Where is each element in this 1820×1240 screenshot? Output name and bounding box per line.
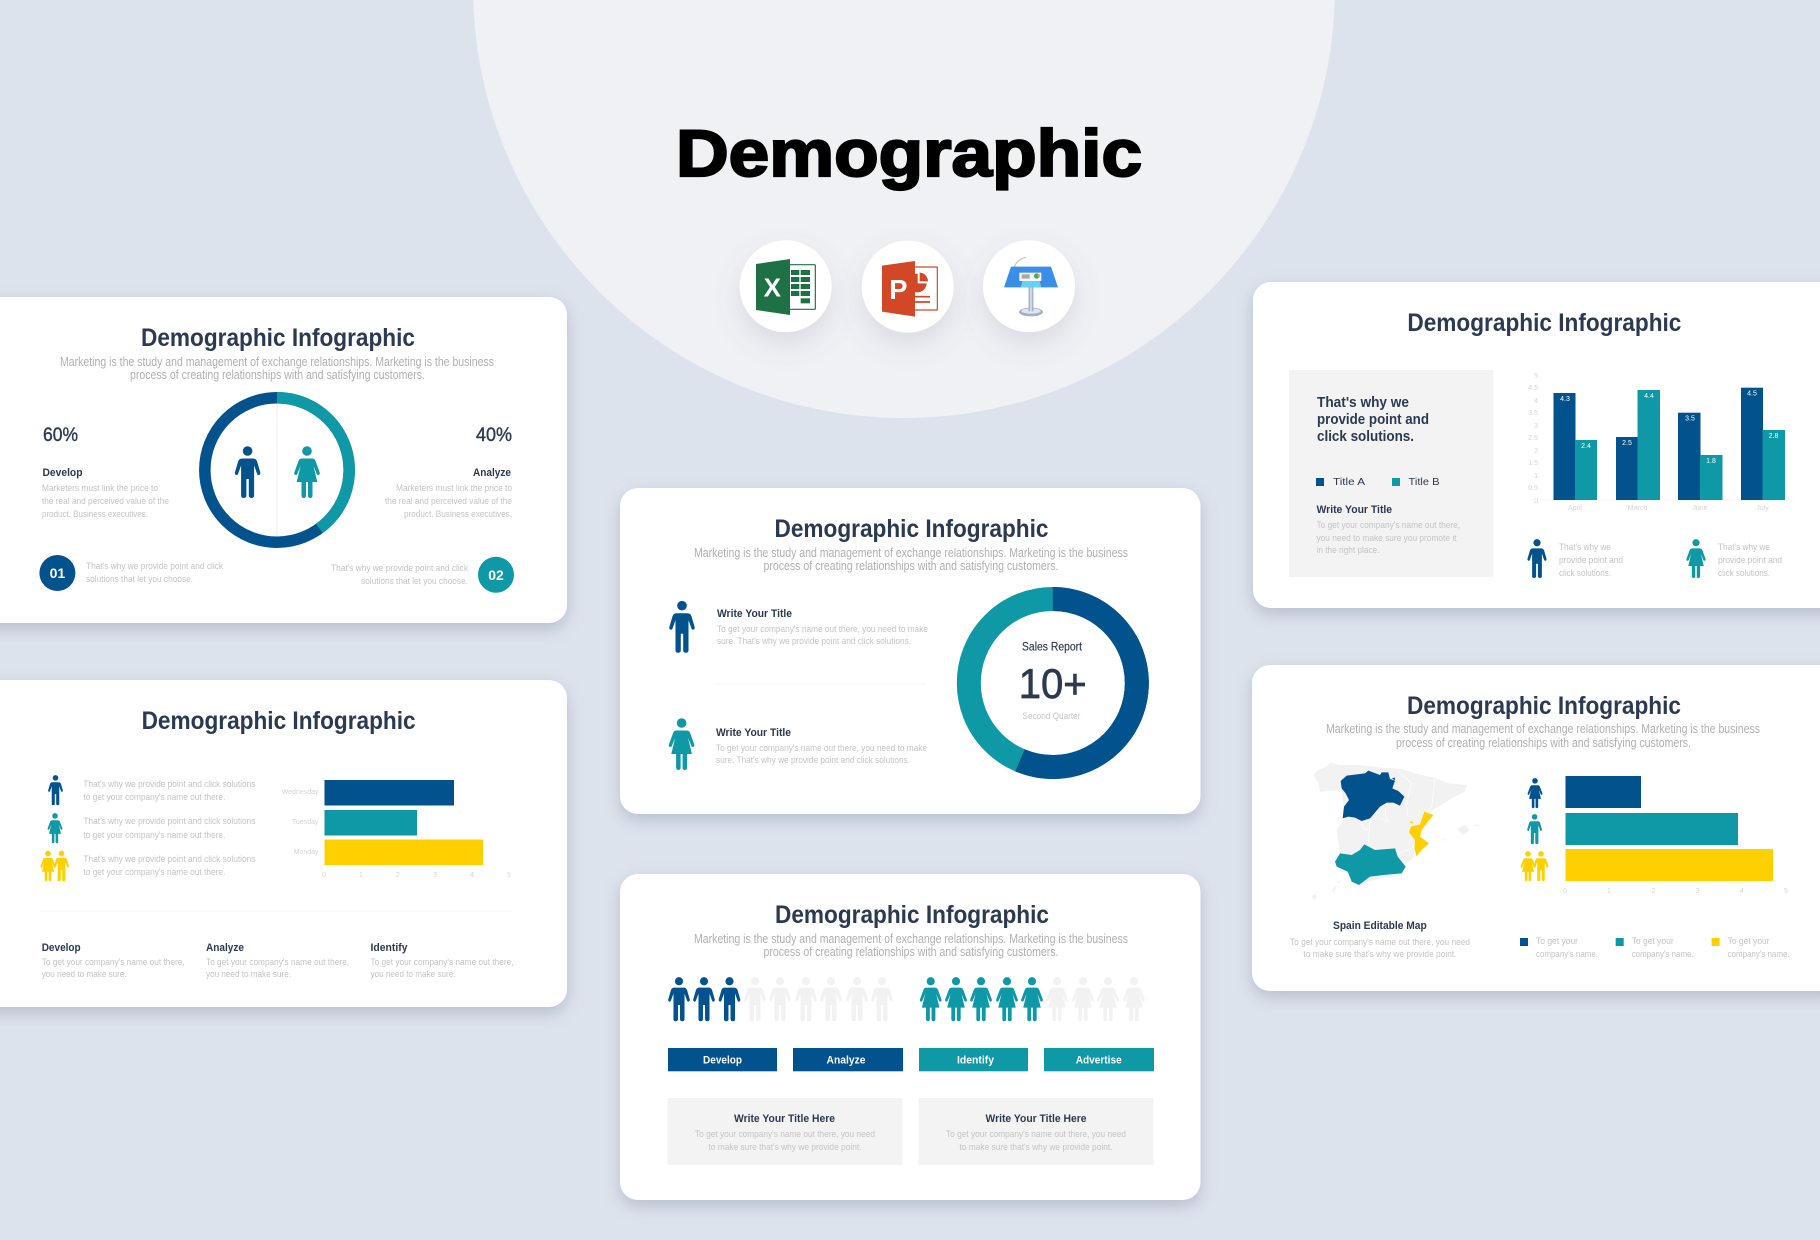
row text 1: That's why we provide point and click solutions (83, 779, 256, 790)
row text 2: That's why we provide point and click solutions (83, 816, 256, 827)
grey box 1: Write Your Title Here (734, 1113, 835, 1125)
bar chart: columns: 1.5 (1528, 460, 1538, 467)
text block: analyze: the real and perceived value of the (385, 496, 512, 507)
text block: develop (42, 467, 169, 520)
note: man: provide point and (1559, 555, 1623, 566)
subtitle: process of creating relationships with and satisfying customers. (1396, 736, 1691, 750)
text block 2: To get your company's name out there, you need to make (716, 743, 927, 754)
icon: man (48, 775, 63, 805)
note 02 (331, 563, 468, 587)
heading: Demographic Infographic (1407, 692, 1681, 720)
badge 01: 01 (50, 565, 65, 581)
panel: column chart (1253, 282, 1820, 608)
pictogram: women (920, 977, 1145, 1021)
text block 2: Write Your Title (716, 727, 791, 739)
bar chart: 4 (1740, 888, 1744, 895)
text block 1: Write Your Title (717, 608, 792, 620)
pictogram: men (668, 977, 893, 1021)
bar chart: Wednesday (282, 789, 319, 796)
icon: excel: X (764, 273, 782, 303)
note: woman: That's why we (1718, 542, 1770, 553)
card background (620, 874, 1200, 1200)
grey sidebar: Title A (1333, 476, 1365, 488)
note 01: solutions that let you choose. (86, 574, 193, 585)
bar chart: columns: 0.5 (1528, 485, 1538, 492)
donut centre text (1019, 642, 1087, 722)
bar chart: columns: March (1628, 505, 1647, 512)
text block: analyze (385, 467, 512, 520)
icon: man (669, 601, 695, 653)
icon: powerpoint (862, 241, 954, 333)
row text 2: to get your company's name out there. (83, 830, 225, 841)
text block: develop: Develop (42, 467, 83, 479)
text block: develop: Marketers must link the price to (42, 483, 158, 494)
bar chart: 4 (470, 872, 474, 879)
map caption: to make sure that's why we provide point. (1304, 949, 1456, 960)
icon: woman (1528, 778, 1542, 808)
note 02: solutions that let you choose. (361, 576, 468, 587)
bar chart: columns: 5 (1534, 373, 1538, 380)
row text 2 (83, 816, 256, 841)
bar chart: columns: 3 (1534, 423, 1538, 430)
bar chart: columns: June (1692, 505, 1708, 512)
heading: Demographic Infographic (774, 515, 1049, 543)
button: develop (668, 1048, 777, 1071)
subtitle (1326, 722, 1760, 750)
text block: analyze: Marketers must link the price to (396, 483, 512, 494)
donut centre text: Second Quarter (1022, 711, 1080, 722)
donut centre text: Sales Report (1022, 642, 1083, 654)
bar chart: 1 (359, 872, 363, 879)
grey sidebar: provide point and (1317, 411, 1429, 428)
text block 1: sure. That's why we provide point and click solutions. (717, 636, 911, 647)
note 01 (86, 561, 223, 585)
icon: couple (40, 851, 69, 881)
note: man: That's why we (1559, 542, 1611, 553)
heading: Demographic Infographic (142, 707, 416, 735)
chart: ring 60/40 (205, 392, 349, 548)
legend 3: company's name. (1728, 949, 1790, 960)
button: analyze: Analyze (826, 1054, 866, 1066)
bar chart: 3 (433, 872, 437, 879)
legend 2: To get your (1632, 936, 1674, 947)
map caption (1290, 920, 1470, 960)
bar chart: columns: 4.5 (1528, 385, 1538, 392)
grey sidebar: Write Your Title (1316, 504, 1392, 516)
legend 1: company's name. (1536, 949, 1598, 960)
button: analyze (793, 1048, 903, 1071)
subtitle (694, 546, 1128, 573)
card background (620, 488, 1200, 814)
column: develop: Develop (42, 942, 81, 954)
bar chart: columns: April (1568, 505, 1582, 512)
text block 1 (717, 608, 928, 647)
text block: analyze: product. Business executives. (404, 509, 512, 520)
note: man (1559, 542, 1623, 579)
row text 3: That's why we provide point and click solutions (83, 854, 256, 865)
chart: donut (969, 599, 1137, 767)
column: analyze: you need to make sure. (206, 969, 291, 980)
stat: 40%: 40% (476, 425, 512, 446)
panel: spain map (1252, 665, 1820, 991)
grey box 1 (667, 1098, 902, 1165)
column: analyze: To get your company's name out there, (206, 957, 349, 968)
bar chart: columns: 4.3 (1560, 396, 1570, 403)
grey sidebar: in the right place. (1316, 545, 1380, 556)
map caption: Spain Editable Map (1333, 920, 1427, 932)
text block: develop: the real and perceived value of the (42, 496, 169, 507)
card background (0, 680, 567, 1007)
note: woman: provide point and (1718, 555, 1782, 566)
badge 02: 02 (488, 567, 504, 583)
bar chart: columns: 2.4 (1581, 443, 1591, 450)
bar chart: columns: 1.8 (1706, 458, 1716, 465)
icon: woman (1686, 539, 1706, 578)
map of spain (1312, 762, 1480, 899)
card background (1252, 665, 1820, 991)
bar chart: columns (1528, 373, 1793, 512)
icon: couple (1521, 851, 1548, 881)
button: identify: Identify (957, 1054, 995, 1066)
note 02: That's why we provide point and click (331, 563, 468, 574)
bar chart: columns: 3.5 (1685, 416, 1695, 422)
icon: man (1527, 814, 1542, 844)
subtitle: process of creating relationships with and satisfying customers. (130, 368, 425, 382)
bar chart: 5 (507, 872, 511, 879)
bar chart: 3 (1696, 888, 1700, 895)
button: advertise (1044, 1048, 1154, 1071)
button: identify (919, 1048, 1028, 1071)
bar chart: Monday (294, 849, 319, 856)
text block 2 (716, 727, 927, 766)
icon: man (1527, 539, 1547, 578)
card background (0, 297, 567, 623)
bar chart: 1 (1607, 888, 1611, 895)
bar chart: columns: 1 (1534, 473, 1538, 480)
map caption: To get your company's name out there, you need (1290, 937, 1470, 948)
row text 3: to get your company's name out there. (83, 867, 225, 878)
note: woman (1718, 542, 1782, 579)
grey sidebar: click solutions. (1317, 428, 1414, 445)
grey box 2 (918, 1098, 1154, 1165)
stat: 60%: 60% (43, 425, 78, 446)
row text 3 (83, 854, 256, 878)
grey sidebar: To get your company's name out there, (1316, 520, 1460, 531)
note: man: click solutions. (1559, 568, 1611, 579)
main title: Demographic (676, 116, 1142, 190)
heading: Demographic Infographic (141, 324, 415, 352)
bar chart: Tuesday (292, 819, 319, 826)
badge 01 (39, 555, 75, 591)
icon: woman (48, 813, 62, 843)
legend 2: company's name. (1632, 949, 1694, 960)
legend 2 (1616, 936, 1694, 960)
legend 3 (1712, 936, 1790, 960)
subtitle: Marketing is the study and management of exchange relationships. Marketing is the business (694, 546, 1128, 560)
heading: Demographic Infographic (775, 901, 1049, 929)
bar chart: columns: 2.5 (1528, 435, 1538, 442)
column: develop (42, 942, 185, 980)
bar chart: columns: 0 (1534, 498, 1538, 505)
bar chart: columns: 4.4 (1644, 393, 1654, 400)
note: woman: click solutions. (1718, 568, 1770, 579)
column: identify: To get your company's name out there, (370, 957, 514, 968)
grey box 2: To get your company's name out there, you need (946, 1129, 1126, 1140)
grey box 1: To get your company's name out there, you need (695, 1129, 875, 1140)
column: develop: To get your company's name out there, (42, 957, 185, 968)
subtitle (60, 355, 494, 382)
column: identify: Identify (370, 942, 408, 954)
icon: excel (740, 240, 832, 332)
bar chart (1563, 776, 1788, 895)
text block: analyze: Analyze (473, 467, 511, 479)
badge 02 (478, 557, 514, 593)
bar chart: columns: 4.5 (1747, 390, 1757, 398)
text block: develop: product. Business executives. (42, 509, 148, 520)
bar chart: 2 (1652, 888, 1656, 895)
icon: man (235, 446, 260, 498)
bar chart (282, 780, 511, 879)
column: analyze: Analyze (206, 942, 244, 954)
heading: Demographic Infographic (1407, 309, 1681, 337)
button: develop: Develop (703, 1054, 742, 1066)
legend 3: To get your (1728, 936, 1770, 947)
text block 2: sure. That's why we provide point and click solutions. (716, 755, 910, 766)
button: advertise: Advertise (1076, 1054, 1122, 1066)
subtitle (694, 932, 1128, 959)
column: analyze (206, 942, 349, 980)
subtitle: Marketing is the study and management of exchange relationships. Marketing is the business (60, 355, 494, 369)
grey box 2: to make sure that's why we provide point. (960, 1142, 1112, 1153)
text block 1: To get your company's name out there, you need to make (717, 624, 928, 635)
icon: woman (669, 718, 694, 770)
bar chart: columns: 2.8 (1769, 433, 1778, 440)
row text 1 (83, 779, 256, 803)
grey box 2: Write Your Title Here (986, 1113, 1086, 1125)
bar chart: 2 (396, 872, 400, 879)
bar chart: 0 (322, 872, 326, 879)
bar chart: columns: 2 (1534, 448, 1538, 455)
card background (1253, 282, 1820, 608)
column: identify (370, 942, 514, 980)
row text 1: to get your company's name out there. (83, 792, 225, 803)
bar chart: columns: July (1756, 505, 1769, 512)
column: develop: you need to make sure. (42, 969, 127, 980)
grey sidebar (1289, 370, 1494, 577)
icon: powerpoint: P (889, 274, 907, 305)
subtitle: process of creating relationships with and satisfying customers. (764, 559, 1058, 573)
bar chart: 5 (1784, 888, 1788, 895)
bar chart: columns: 4 (1534, 398, 1538, 405)
grey sidebar: Title B (1408, 476, 1440, 488)
note 01: That's why we provide point and click (86, 561, 223, 572)
donut centre text: 10+ (1019, 660, 1087, 707)
bar chart: columns: 3.5 (1528, 410, 1538, 417)
legend 1 (1520, 936, 1598, 960)
panel: pictogram row (620, 874, 1200, 1200)
panel: gender split donut (0, 297, 567, 623)
icon: woman (294, 446, 320, 498)
icon: keynote (983, 240, 1075, 332)
subtitle: Marketing is the study and management of exchange relationships. Marketing is the business (694, 932, 1128, 946)
subtitle: process of creating relationships with and satisfying customers. (764, 945, 1058, 959)
column: identify: you need to make sure. (370, 969, 456, 980)
bar chart: columns: 2.5 (1622, 440, 1632, 447)
grey box 1: to make sure that's why we provide point. (708, 1142, 862, 1153)
grey sidebar: That's why we (1317, 394, 1409, 411)
top light semicircle (473, 0, 1335, 418)
bar chart: 0 (1563, 888, 1567, 895)
panel: sales report (620, 488, 1200, 814)
grey sidebar: you need to make sure you promote it (1316, 533, 1457, 544)
panel: weekday bars (0, 680, 567, 1007)
legend 1: To get your (1536, 936, 1578, 947)
